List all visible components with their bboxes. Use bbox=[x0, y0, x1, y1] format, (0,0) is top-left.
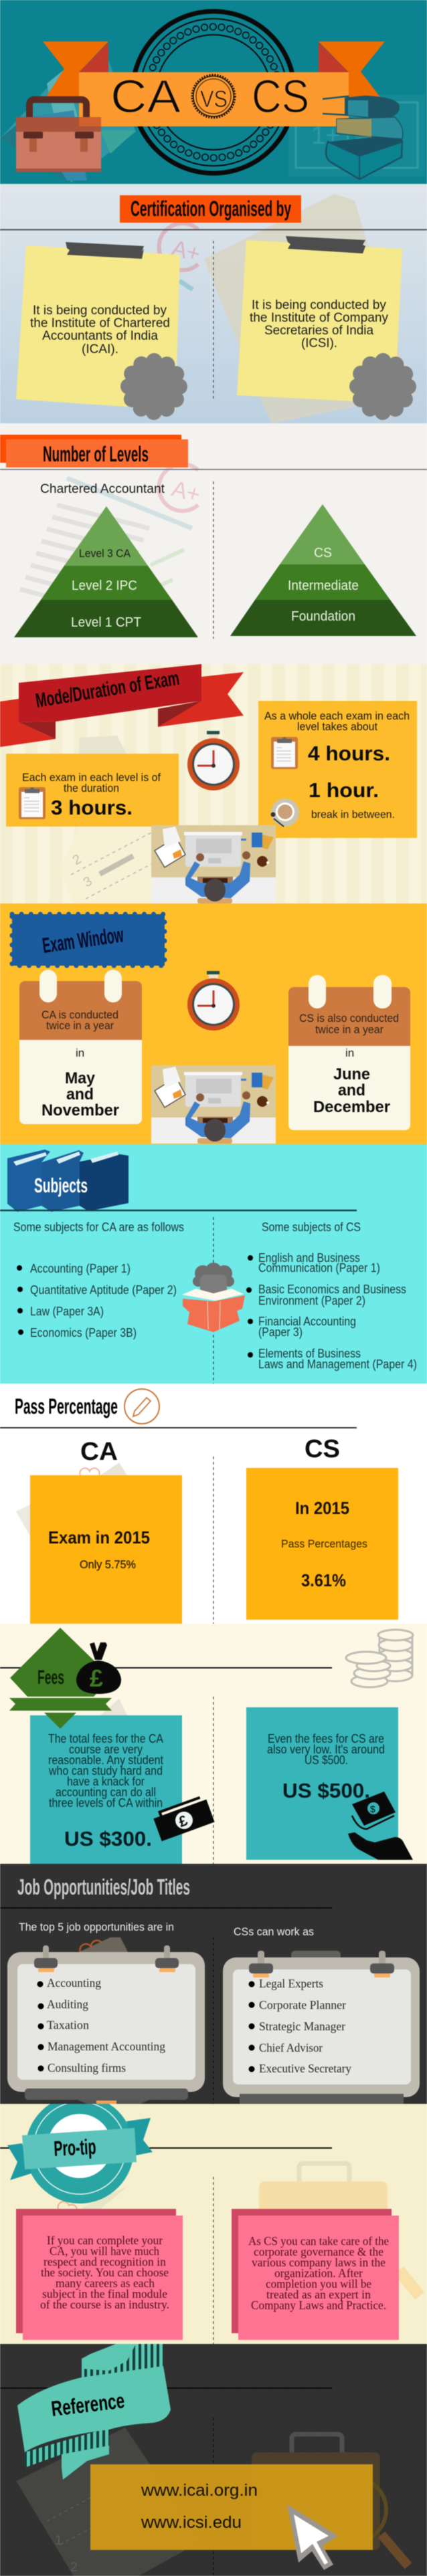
list: CS subjects: Elements of Business bbox=[258, 1347, 361, 1360]
board: CS jobs bbox=[223, 1951, 420, 2104]
heading: Job Opportunities/Job Titles bbox=[17, 1874, 190, 1899]
card: CA fees bbox=[30, 1715, 182, 1864]
icon: briefcase bbox=[16, 100, 101, 172]
section: number of levels bbox=[0, 423, 427, 664]
section: fees bbox=[0, 1624, 427, 1864]
faded briefcase bbox=[259, 2163, 420, 2296]
paper behind card bbox=[58, 2187, 127, 2209]
list: CA subjects: Quantitative Aptitude (Paper 2) bbox=[30, 1283, 177, 1297]
seal: CS bbox=[353, 357, 412, 416]
vs badge: VS bbox=[200, 86, 228, 112]
seal ring bbox=[133, 11, 294, 173]
board: CA jobs bbox=[7, 1937, 205, 2104]
pyramid: CS: Intermediate bbox=[288, 578, 359, 593]
illustration: person at desk bbox=[151, 825, 276, 903]
card: CA fees: US $300. bbox=[64, 1827, 152, 1850]
card: CS pass: 3.61% bbox=[301, 1570, 346, 1590]
faded A+ mark: A+ bbox=[169, 235, 203, 267]
heading bbox=[120, 195, 301, 223]
calendar: CA: CA is conducted bbox=[41, 1008, 118, 1021]
card: CS fees: also very low. It's around bbox=[267, 1743, 385, 1756]
list: CS subjects: Communication (Paper 1) bbox=[258, 1261, 380, 1275]
icon: hand with dollar note: $ bbox=[370, 1804, 375, 1814]
list: CA subjects: Accounting (Paper 1) bbox=[30, 1262, 131, 1275]
icon: books with heading bbox=[7, 1150, 129, 1212]
card: CS duration: 4 hours. bbox=[308, 742, 390, 765]
card: CA fees: who can study hard and bbox=[48, 1764, 163, 1778]
section: mode and duration of exam bbox=[0, 664, 427, 903]
card: CA tip: the society. You can choose bbox=[41, 2266, 169, 2279]
card: CS duration: 1 hour. bbox=[309, 778, 379, 802]
icon: pencil bbox=[124, 1389, 159, 1424]
card: CA fees: accounting can do all bbox=[56, 1786, 156, 1799]
card: CS duration: break in between. bbox=[311, 809, 395, 821]
intro: CS jobs: CSs can work as bbox=[234, 1925, 314, 1938]
faded clipboard: 1 bbox=[55, 2533, 62, 2548]
note: CS bbox=[237, 236, 402, 403]
note: CA: Accountants of India bbox=[42, 329, 158, 343]
faded clipboard: 2 bbox=[70, 2560, 78, 2575]
ribbon bbox=[79, 72, 349, 126]
board: CA jobs: Consulting firms bbox=[48, 2061, 126, 2074]
heading ribbon bbox=[0, 664, 244, 747]
pyramid: CS: Foundation bbox=[291, 609, 355, 624]
pyramid: CA: Level 3 CA bbox=[79, 547, 131, 560]
section: reference bbox=[0, 2344, 427, 2576]
heading badge: fees bbox=[9, 1628, 112, 1729]
pyramid: CS bbox=[230, 504, 416, 636]
heading: Pass Percentage bbox=[15, 1394, 118, 1418]
board: CA jobs: Accounting bbox=[47, 1976, 101, 1990]
label: CS: CS bbox=[305, 1435, 340, 1463]
card: CS pass: Pass Percentages bbox=[281, 1537, 367, 1550]
heading badge bbox=[12, 914, 165, 966]
note: CS: (ICSI). bbox=[301, 336, 337, 350]
section: pro-tip bbox=[0, 2095, 427, 2344]
list: CS subjects: English and Business bbox=[258, 1251, 360, 1265]
card: CA tip bbox=[16, 2209, 183, 2340]
faded blackboard bbox=[288, 95, 425, 177]
list: CS subjects: Some subjects of CS bbox=[262, 1220, 361, 1234]
card: CA fees: course are very bbox=[69, 1743, 143, 1756]
list: CS subjects: Financial Accounting bbox=[258, 1315, 356, 1328]
card: CA tip: subject in the final module bbox=[42, 2287, 167, 2300]
card: CS duration bbox=[258, 701, 417, 838]
icon: cursor bbox=[287, 2504, 338, 2570]
calendar: CS: June bbox=[333, 1065, 370, 1083]
board: CS jobs: Legal Experts bbox=[259, 1977, 323, 1990]
icon: coins bbox=[346, 1630, 413, 1687]
card: CS tip: corporate governance & the bbox=[254, 2245, 383, 2258]
icon: money bag: £ bbox=[90, 1665, 103, 1692]
heading: Number of Levels bbox=[43, 442, 149, 466]
calendar: CA: and bbox=[66, 1085, 94, 1103]
note: CA bbox=[16, 242, 180, 410]
card: CS duration: level takes about bbox=[297, 720, 377, 733]
card: CS pass bbox=[246, 1468, 398, 1620]
title CS: CS bbox=[252, 70, 309, 122]
card: CA fees: have a knack for bbox=[67, 1775, 145, 1788]
icon: books bbox=[323, 96, 403, 179]
card: CA pass bbox=[30, 1475, 182, 1624]
card: CS tip: various company laws in the bbox=[252, 2256, 386, 2269]
board: CA jobs: Taxation bbox=[47, 2018, 89, 2032]
section: header bbox=[0, 0, 427, 184]
card: CA duration: Each exam in each level is of bbox=[22, 771, 161, 784]
calendar: CS: CS is also conducted bbox=[299, 1012, 399, 1025]
faded clipboard: 2 bbox=[70, 852, 84, 868]
faded blackboard: 1+1= bbox=[311, 122, 369, 150]
section: subjects bbox=[0, 1144, 427, 1384]
section: exam window bbox=[0, 903, 427, 1144]
faded A+ mark bbox=[159, 223, 203, 290]
card: CS tip: organization. After bbox=[274, 2266, 363, 2280]
pyramid: CA bbox=[14, 506, 198, 637]
card: CA duration: 3 hours. bbox=[51, 796, 133, 819]
card: CS fees: Even the fees for CS are bbox=[268, 1732, 384, 1745]
list: CS subjects: Environment (Paper 2) bbox=[258, 1294, 365, 1307]
icon: pound banknote: £ bbox=[176, 1812, 190, 1830]
note: CS: Secretaries of India bbox=[264, 324, 373, 338]
card: CS tip: treated as an expert in bbox=[266, 2288, 371, 2301]
icon: hand with dollar note bbox=[348, 1792, 413, 1860]
badge and ribbon heading: Pro-tip bbox=[53, 2135, 96, 2161]
card: CA tip: CA, you will have much bbox=[50, 2244, 159, 2258]
card: CS fees: US $500. bbox=[305, 1753, 348, 1767]
card: CS pass: In 2015 bbox=[295, 1498, 349, 1518]
paper behind card bbox=[16, 1463, 127, 1536]
board: CS jobs: Executive Secretary bbox=[259, 2062, 351, 2075]
heading bbox=[0, 435, 188, 467]
card: CA tip: many careers as each bbox=[56, 2276, 155, 2290]
section: certification organised by bbox=[0, 184, 427, 423]
faded clipboard bbox=[60, 736, 151, 903]
section: job opportunities bbox=[0, 1864, 427, 2104]
box: links bbox=[90, 2464, 373, 2550]
heading badge: Exam Window bbox=[41, 922, 125, 958]
note: CS: the Institute of Company bbox=[250, 311, 388, 325]
calendar: CA: May bbox=[65, 1069, 96, 1087]
intro: CA jobs: The top 5 job opportunities are in bbox=[19, 1921, 174, 1933]
card: CS fees bbox=[246, 1707, 398, 1860]
heading ribbon bbox=[17, 2344, 171, 2480]
icon: reader with book bbox=[182, 1263, 245, 1332]
card: CS tip: completion you will be bbox=[266, 2277, 371, 2290]
decorative shapes behind briefcase bbox=[0, 58, 136, 183]
note: CA: the Institute of Chartered bbox=[30, 316, 170, 330]
board: CA jobs: Management Accounting bbox=[48, 2040, 165, 2053]
card: CA tip: If you can complete your bbox=[47, 2234, 163, 2247]
card: CS fees: US $500. bbox=[282, 1779, 370, 1802]
card: CA duration: the duration bbox=[64, 782, 119, 794]
label: CA: CA bbox=[80, 1438, 118, 1466]
calendar: CS: twice in a year bbox=[315, 1023, 383, 1036]
list: CA subjects: Law (Paper 3A) bbox=[30, 1305, 104, 1318]
card: CA fees: reasonable. Any student bbox=[48, 1753, 163, 1767]
calendar: CS: in bbox=[345, 1047, 354, 1059]
background paper bbox=[204, 194, 416, 423]
list: CA subjects bbox=[13, 1220, 184, 1339]
pyramid: CA: Level 2 IPC bbox=[72, 578, 137, 593]
card: CA tip: respect and recognition in bbox=[44, 2255, 166, 2268]
section: pass percentage bbox=[0, 1384, 427, 1624]
icon: books with heading: Subjects bbox=[34, 1174, 88, 1197]
calendar: CA: twice in a year bbox=[46, 1019, 114, 1032]
faded clipboard: 3 bbox=[81, 874, 94, 890]
card: CS tip: Company Laws and Practice. bbox=[251, 2298, 386, 2312]
list: CS subjects: Basic Economics and Business bbox=[258, 1283, 406, 1296]
illustration: person at desk bbox=[151, 1065, 276, 1144]
calendar: CA: November bbox=[41, 1101, 119, 1119]
heading ribbon: Mode/Duration of Exam bbox=[34, 667, 181, 712]
list: CS subjects bbox=[246, 1220, 417, 1371]
icon: stopwatch bbox=[187, 971, 240, 1031]
pyramid: CS: CS bbox=[314, 546, 332, 560]
note: CA: (ICAI). bbox=[82, 342, 118, 356]
icon: money bag bbox=[76, 1642, 121, 1694]
heading ribbon: Reference bbox=[50, 2388, 126, 2421]
board: CA jobs: Auditing bbox=[47, 1998, 88, 2011]
card: CA tip: of the course is an industry. bbox=[40, 2298, 169, 2311]
card: CA fees: The total fees for the CA bbox=[48, 1732, 163, 1745]
card: CS tip bbox=[232, 2209, 399, 2340]
box: links: www.icsi.edu bbox=[141, 2513, 242, 2532]
icon: pound banknote bbox=[152, 1794, 215, 1841]
faded briefcase and magnifier bbox=[252, 2434, 408, 2566]
icon: stopwatch bbox=[187, 731, 240, 790]
label: chartered accountant: Chartered Accountant bbox=[40, 482, 165, 496]
paper behind card bbox=[100, 1699, 127, 1715]
pyramid: CA: Level 1 CPT bbox=[71, 615, 141, 630]
badge and ribbon heading bbox=[7, 2095, 153, 2204]
list: CS subjects: (Paper 3) bbox=[258, 1325, 303, 1339]
card: CA fees: three levels of CA within bbox=[49, 1796, 163, 1810]
list: CA subjects: Some subjects for CA are as follows bbox=[13, 1220, 184, 1234]
calendar: CS: December bbox=[313, 1098, 390, 1116]
seal: CA bbox=[124, 357, 183, 416]
vs badge bbox=[192, 75, 235, 118]
card: CA pass: Only 5.75% bbox=[80, 1558, 136, 1571]
box: links: www.icai.org.in bbox=[141, 2481, 258, 2500]
note: CA: It is being conducted by bbox=[33, 304, 167, 318]
title CA: CA bbox=[110, 70, 181, 122]
list: CA subjects: Economics (Paper 3B) bbox=[30, 1326, 137, 1339]
board: CS jobs: Strategic Manager bbox=[259, 2020, 345, 2033]
board: CS jobs: Corporate Planner bbox=[259, 1998, 346, 2012]
card: CS tip: As CS you can take care of the bbox=[248, 2234, 389, 2248]
heading: Certification Organised by bbox=[131, 197, 291, 221]
faded paper marks bbox=[20, 464, 203, 600]
card: CA duration bbox=[6, 754, 179, 827]
ribbon tails bbox=[43, 41, 385, 97]
faded clipboard bbox=[16, 2428, 201, 2576]
faded paper marks: A+ bbox=[169, 476, 203, 508]
heading badge: fees: Fees bbox=[37, 1667, 64, 1689]
calendar: CS bbox=[288, 975, 410, 1130]
calendar: CA bbox=[19, 970, 142, 1124]
card: CA pass: Exam in 2015 bbox=[48, 1527, 150, 1547]
board: CS jobs: Chief Advisor bbox=[259, 2041, 323, 2054]
note: CS: It is being conducted by bbox=[252, 298, 386, 312]
card: CS duration: As a whole each exam in each bbox=[264, 710, 410, 722]
calendar: CA: in bbox=[76, 1047, 84, 1059]
calendar: CS: and bbox=[338, 1081, 365, 1099]
